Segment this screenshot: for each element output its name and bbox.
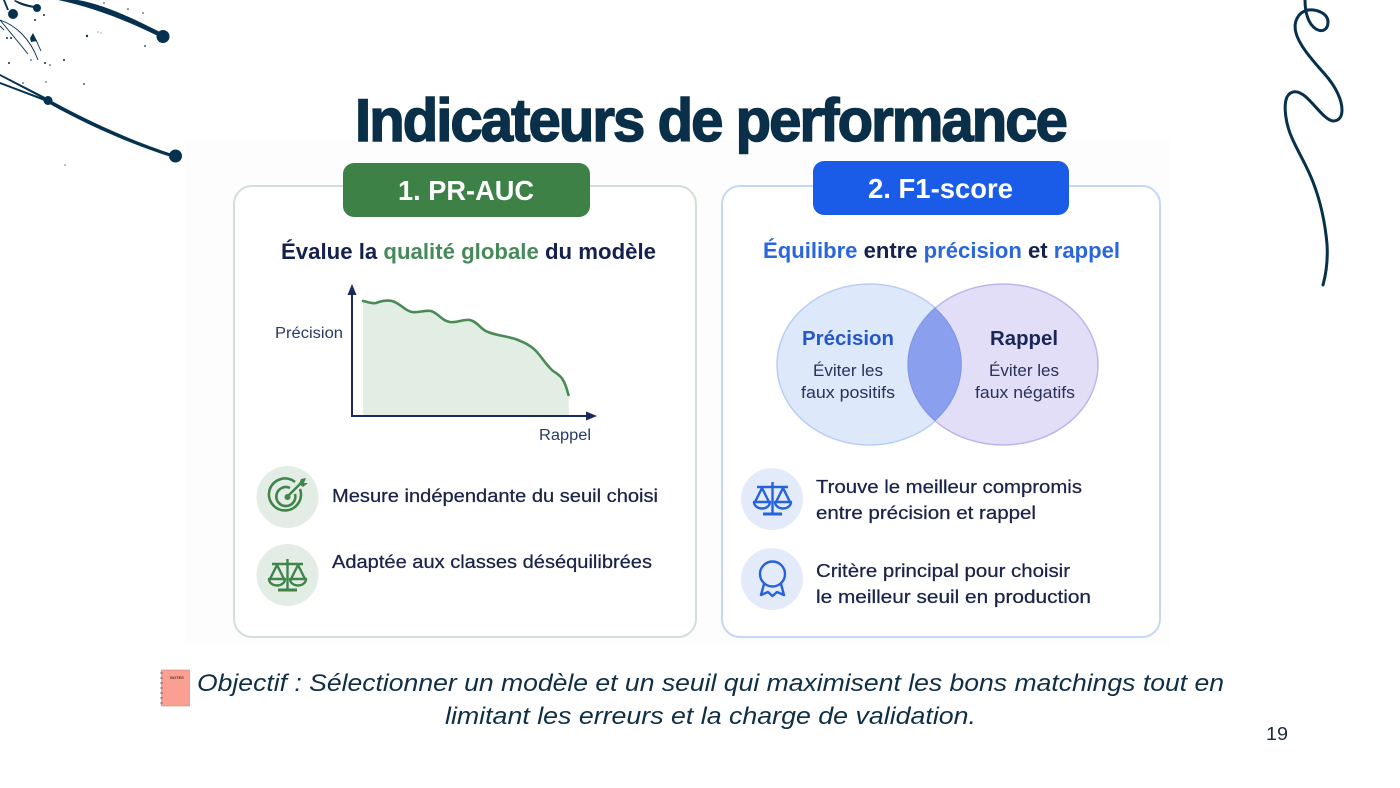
objective text: Objectif : Sélectionner un modèle et un seuil qui maximisent les bons matchings tout en (197, 670, 1224, 697)
chart: venn diagram: Éviter les (813, 361, 883, 380)
bullet: compromise (816, 476, 1082, 523)
icon: award ribbon (741, 548, 803, 610)
page number: 19 (1266, 723, 1288, 744)
chart: venn diagram: Éviter les (989, 361, 1059, 380)
icon: target (256, 466, 318, 528)
badge: 1. PR-AUC: 1. PR-AUC (398, 175, 534, 206)
badge: 2. F1-score: 2. F1-score (868, 173, 1013, 204)
panel: F1-score (722, 161, 1160, 637)
badge: 2. F1-score (813, 161, 1069, 215)
title: Indicateurs de performance (355, 87, 1067, 154)
chart: venn diagram: faux négatifs (975, 384, 1075, 402)
icon: scales blue (741, 468, 803, 530)
bullet: compromise: Trouve le meilleur compromis (816, 476, 1082, 497)
chart: venn diagram: faux positifs (801, 384, 895, 402)
panel border: PR-AUC (234, 186, 696, 637)
objective text: limitant les erreurs et la charge de validation. (445, 703, 976, 730)
bullet: production threshold (816, 560, 1091, 607)
chart: venn diagram (777, 284, 1098, 445)
heading: quality: Évalue la qualité globale du modèle (281, 239, 656, 264)
heading: balance: Équilibre entre précision et rappel (763, 238, 1120, 263)
bullet: threshold independent: Mesure indépendante du seuil choisi (332, 485, 658, 506)
badge: 1. PR-AUC (343, 163, 590, 217)
chart: venn diagram: Précision (802, 328, 894, 350)
panel border: F1-score (722, 186, 1160, 637)
icon: scales green (256, 544, 318, 606)
bullet: production threshold: le meilleur seuil en production (816, 586, 1091, 607)
icon: notebook: NOTES (170, 675, 184, 680)
objective text (197, 670, 1224, 730)
bullet: compromise: entre précision et rappel (816, 502, 1036, 523)
chart: venn diagram: Rappel (990, 328, 1058, 350)
chart: precision-recall curve: Précision (275, 325, 343, 342)
decoration: squiggle top-right (1285, 0, 1342, 285)
decoration: ink splatter top-left (0, 0, 182, 166)
chart: precision-recall curve: Rappel (539, 427, 591, 444)
bullet: imbalanced classes: Adaptée aux classes déséquilibrées (332, 551, 652, 572)
panel: PR-AUC (234, 163, 696, 637)
chart: precision-recall curve (275, 284, 597, 444)
bullet: production threshold: Critère principal pour choisir (816, 560, 1070, 581)
icon: notebook (160, 670, 190, 706)
